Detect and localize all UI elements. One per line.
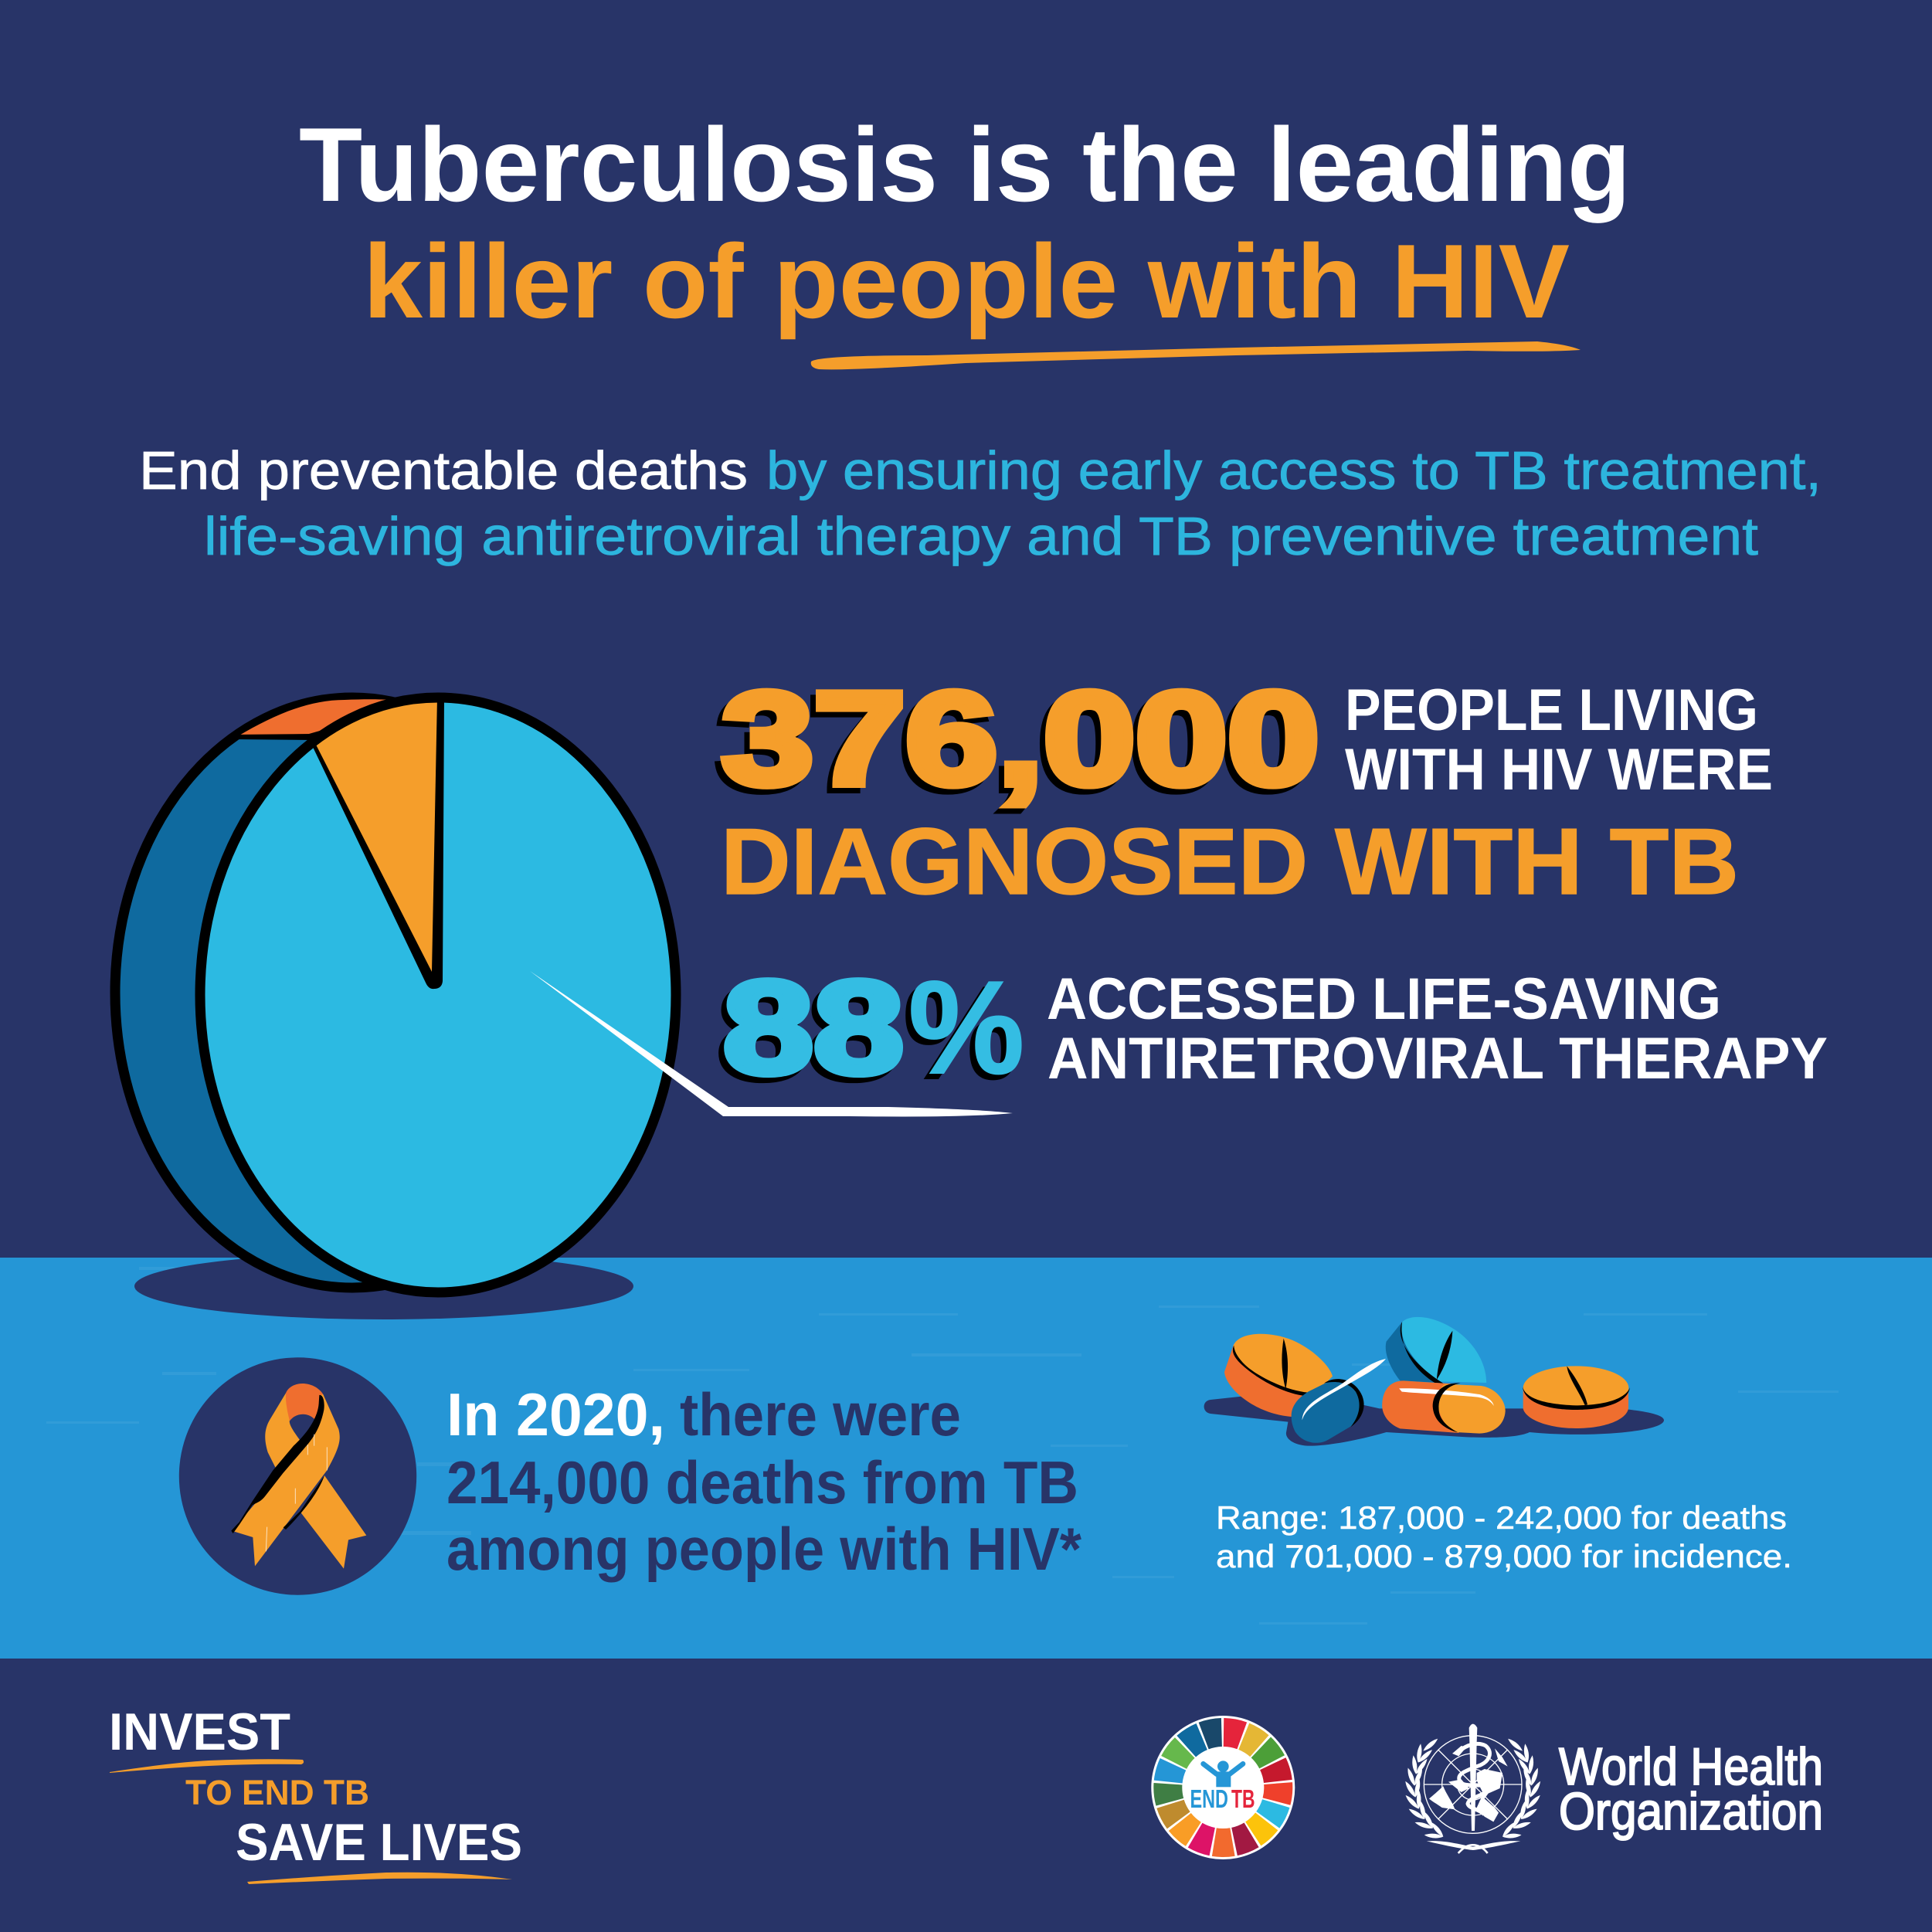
diagnosed heading: DIAGNOSED WITH TB: [721, 809, 1739, 914]
logo: WHO wordmark: Organization: [1559, 1782, 1823, 1841]
logo: WHO wordmark: World Health: [1559, 1737, 1823, 1796]
staff and snake: [1469, 1724, 1477, 1831]
stat: 88 percent: [723, 954, 1024, 1102]
range note: Range: 187,000 - 242,000 for deaths: [1216, 1499, 1787, 1536]
slogan: TO END TB: [185, 1773, 369, 1812]
slogan: INVEST: [109, 1703, 290, 1761]
range note: [1216, 1499, 1792, 1574]
stat: 88 percent: 88: [723, 954, 904, 1102]
water band: [0, 1258, 1932, 1659]
continents: [1429, 1748, 1508, 1822]
leader line: [530, 971, 1013, 1117]
range note: and 701,000 - 879,000 for incidence.: [1216, 1538, 1792, 1574]
subtitle: [139, 440, 1822, 566]
deaths text: among people with HIV*: [446, 1515, 1082, 1583]
stat label: WITH HIV WERE: [1345, 737, 1773, 803]
stat label: ACCESSED LIFE-SAVING: [1047, 966, 1721, 1032]
deaths text: 214,000 deaths from TB: [446, 1448, 1078, 1516]
pills shadow: [1204, 1390, 1664, 1446]
pie shadow: [134, 1253, 633, 1319]
blue tablet: [1386, 1317, 1486, 1384]
deaths text: there were: [680, 1380, 961, 1448]
orange tablet: [1224, 1334, 1333, 1417]
stat: 376,000: [722, 665, 1773, 813]
logo: End TB: [1151, 1716, 1295, 1859]
stat label: [1345, 677, 1773, 803]
round tablet: [1523, 1366, 1630, 1428]
person icon: [1204, 1761, 1243, 1787]
stat: 88 percent: %: [908, 954, 1024, 1102]
title: Tuberculosis is the leading: [299, 106, 1631, 223]
pie chart: [115, 695, 679, 1295]
subtitle: by ensuring early access to TB treatment,: [766, 440, 1822, 501]
icon: pills: [1204, 1317, 1664, 1446]
stat label: [1047, 966, 1828, 1092]
pie slice: [309, 695, 444, 989]
subtitle: life-saving antiretroviral therapy and TB preventive treatment: [204, 506, 1758, 566]
title: [299, 106, 1631, 369]
logo: End TB: END: [1190, 1784, 1228, 1813]
logo: End TB: TB: [1231, 1784, 1255, 1813]
slogan: SAVE LIVES: [236, 1813, 522, 1872]
pie depth: [115, 698, 589, 1288]
orange capsule: [1382, 1380, 1506, 1434]
stat: 376,000: 376,000: [722, 665, 1319, 813]
stat label: PEOPLE LIVING: [1345, 677, 1758, 743]
logo: WHO wordmark: [1559, 1737, 1823, 1841]
emblem ribbon: [1427, 1841, 1520, 1853]
icon: ribbon badge: [179, 1357, 416, 1595]
pie depth slice: [238, 699, 390, 738]
subtitle: End preventable deaths: [139, 440, 748, 501]
deaths text: [446, 1380, 1082, 1583]
title: killer of people with HIV: [363, 222, 1570, 340]
logo: WHO emblem: [1404, 1724, 1542, 1853]
slogan: [109, 1703, 522, 1884]
pie face 88 percent: [197, 695, 679, 1295]
stat label: ANTIRETROVIRAL THERAPY: [1047, 1026, 1828, 1092]
blue capsule: [1292, 1359, 1386, 1443]
deaths text: In 2020,: [446, 1380, 665, 1448]
globe: [1424, 1736, 1522, 1833]
